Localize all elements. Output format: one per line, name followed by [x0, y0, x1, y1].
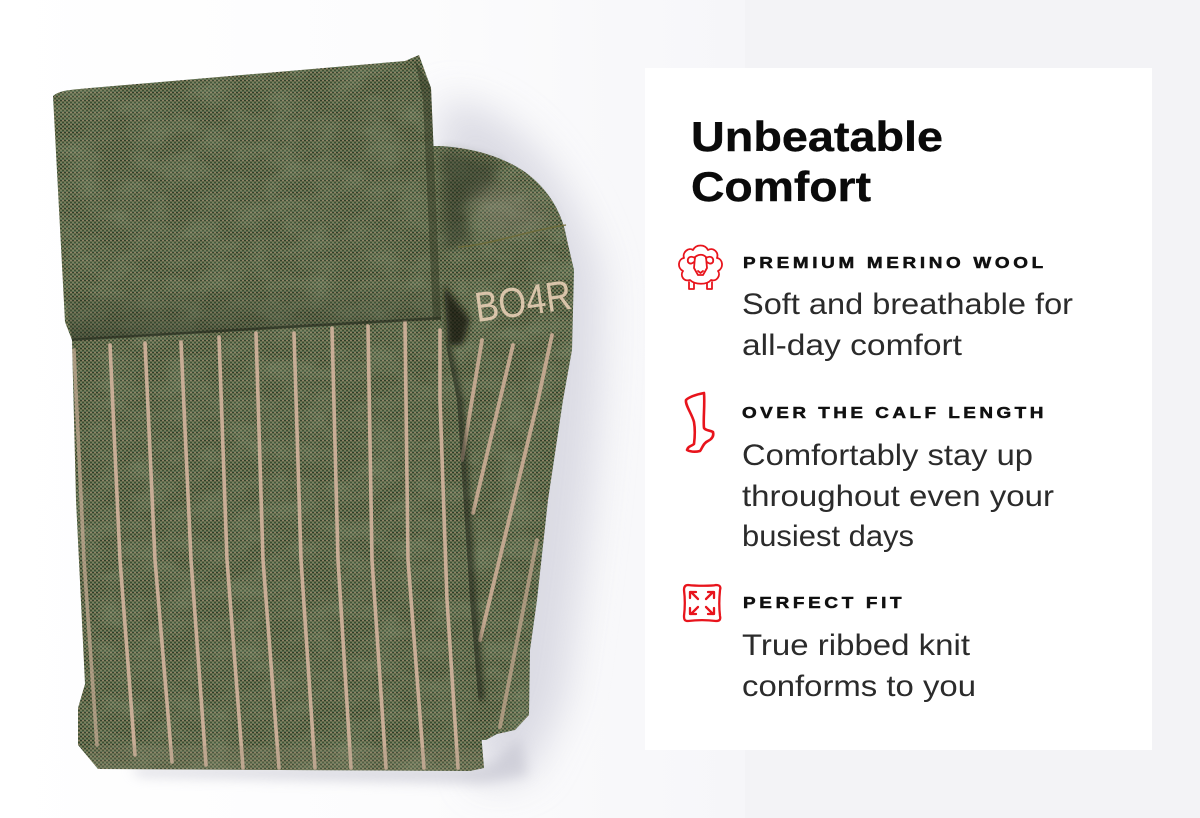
crease between folds: [446, 345, 480, 700]
panel: unbeatable comfort card: [645, 68, 1152, 750]
feature: over the calf length: [686, 393, 1054, 553]
description: [742, 439, 1054, 553]
description: Comfortably stay up: [742, 439, 1033, 472]
cuff fold edge: [65, 60, 485, 775]
back ribs: [462, 335, 552, 727]
feature: perfect fit: [684, 585, 976, 703]
title: Unbeatable: [691, 113, 943, 160]
icon: calf and foot: [686, 393, 713, 452]
label: PERFECT FIT: [743, 594, 902, 612]
description: Soft and breathable for: [742, 288, 1073, 321]
vertical ribs: [74, 322, 458, 768]
label: PREMIUM MERINO WOOL: [743, 254, 1044, 272]
back folded sock: [430, 146, 574, 740]
description: [742, 629, 976, 703]
icon: sheep: [679, 246, 722, 289]
title: [691, 113, 943, 210]
sock shadow: [130, 100, 601, 785]
description: throughout even your: [742, 480, 1054, 513]
icon: expanding arrows in a square: [684, 585, 720, 621]
photo: folded green merino sock: [53, 55, 601, 785]
knit lettering: BO4R: [472, 271, 574, 331]
description: all-day comfort: [742, 329, 963, 362]
front sock body: [53, 55, 485, 775]
description: busiest days: [742, 520, 914, 553]
title: Comfort: [691, 163, 871, 210]
label: OVER THE CALF LENGTH: [742, 404, 1043, 422]
feature: premium merino wool: [679, 246, 1073, 362]
description: True ribbed knit: [742, 629, 971, 662]
description: conforms to you: [742, 670, 976, 703]
description: [742, 288, 1073, 362]
